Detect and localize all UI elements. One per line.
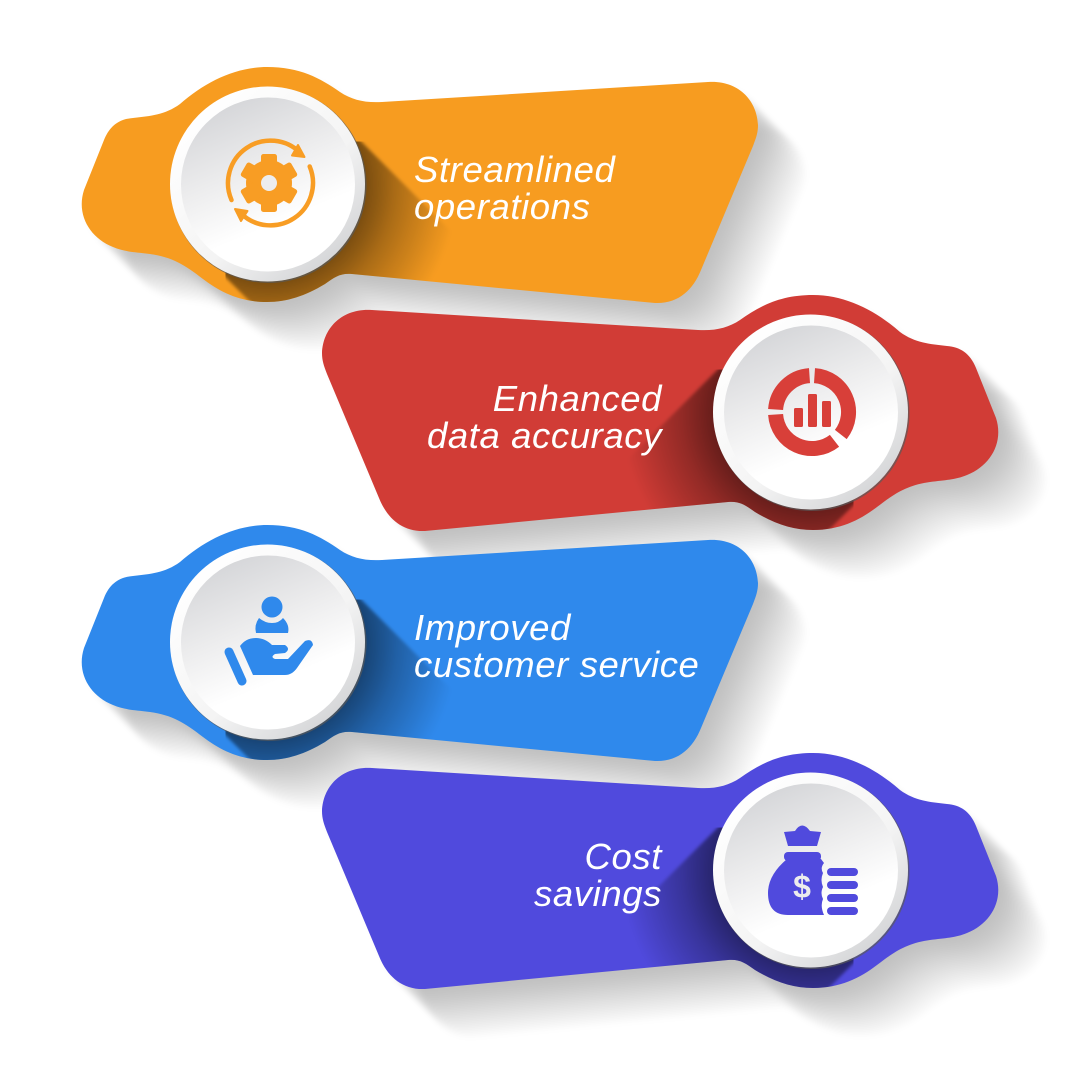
banner: red [322, 295, 998, 531]
label: streamlined operations: Streamlined [414, 149, 615, 190]
label: enhanced data accuracy: data accuracy [427, 415, 664, 456]
panel: streamlined operations [82, 67, 802, 346]
disc: red panel [713, 314, 910, 511]
disc shadow: red panel [635, 370, 854, 530]
long shadow: purple panel [325, 756, 1046, 1037]
icon: gear with circular arrows [228, 141, 313, 225]
disc shadow: purple panel [634, 828, 854, 988]
label: improved customer service: customer service [414, 644, 699, 685]
disc shadow: orange panel [226, 142, 446, 302]
disc: orange panel [170, 86, 366, 283]
panel: cost savings [322, 753, 1042, 1032]
banner: purple [322, 753, 998, 989]
long shadow: blue panel [85, 528, 806, 809]
banner: blue [82, 525, 758, 761]
long shadow: orange panel [85, 70, 806, 351]
label: cost savings: savings [534, 873, 662, 914]
label: improved customer service: Improved [414, 607, 571, 648]
disc shadow: blue panel [226, 600, 444, 760]
disc: purple panel [713, 772, 910, 969]
panel: improved customer service [82, 525, 802, 804]
icon: money bag and coins: $ [793, 868, 811, 904]
label: cost savings: Cost [585, 836, 662, 877]
icon: donut chart with magnifier and bars [776, 376, 849, 449]
panel: enhanced data accuracy [322, 295, 1042, 574]
disc: blue panel [170, 544, 366, 741]
long shadow: red panel [325, 298, 1046, 579]
label: streamlined operations: operations [414, 186, 590, 227]
label: enhanced data accuracy: Enhanced [493, 378, 662, 419]
banner: orange [82, 67, 758, 303]
icon: money bag and coins [768, 826, 858, 915]
icon: hand holding person [229, 596, 313, 681]
